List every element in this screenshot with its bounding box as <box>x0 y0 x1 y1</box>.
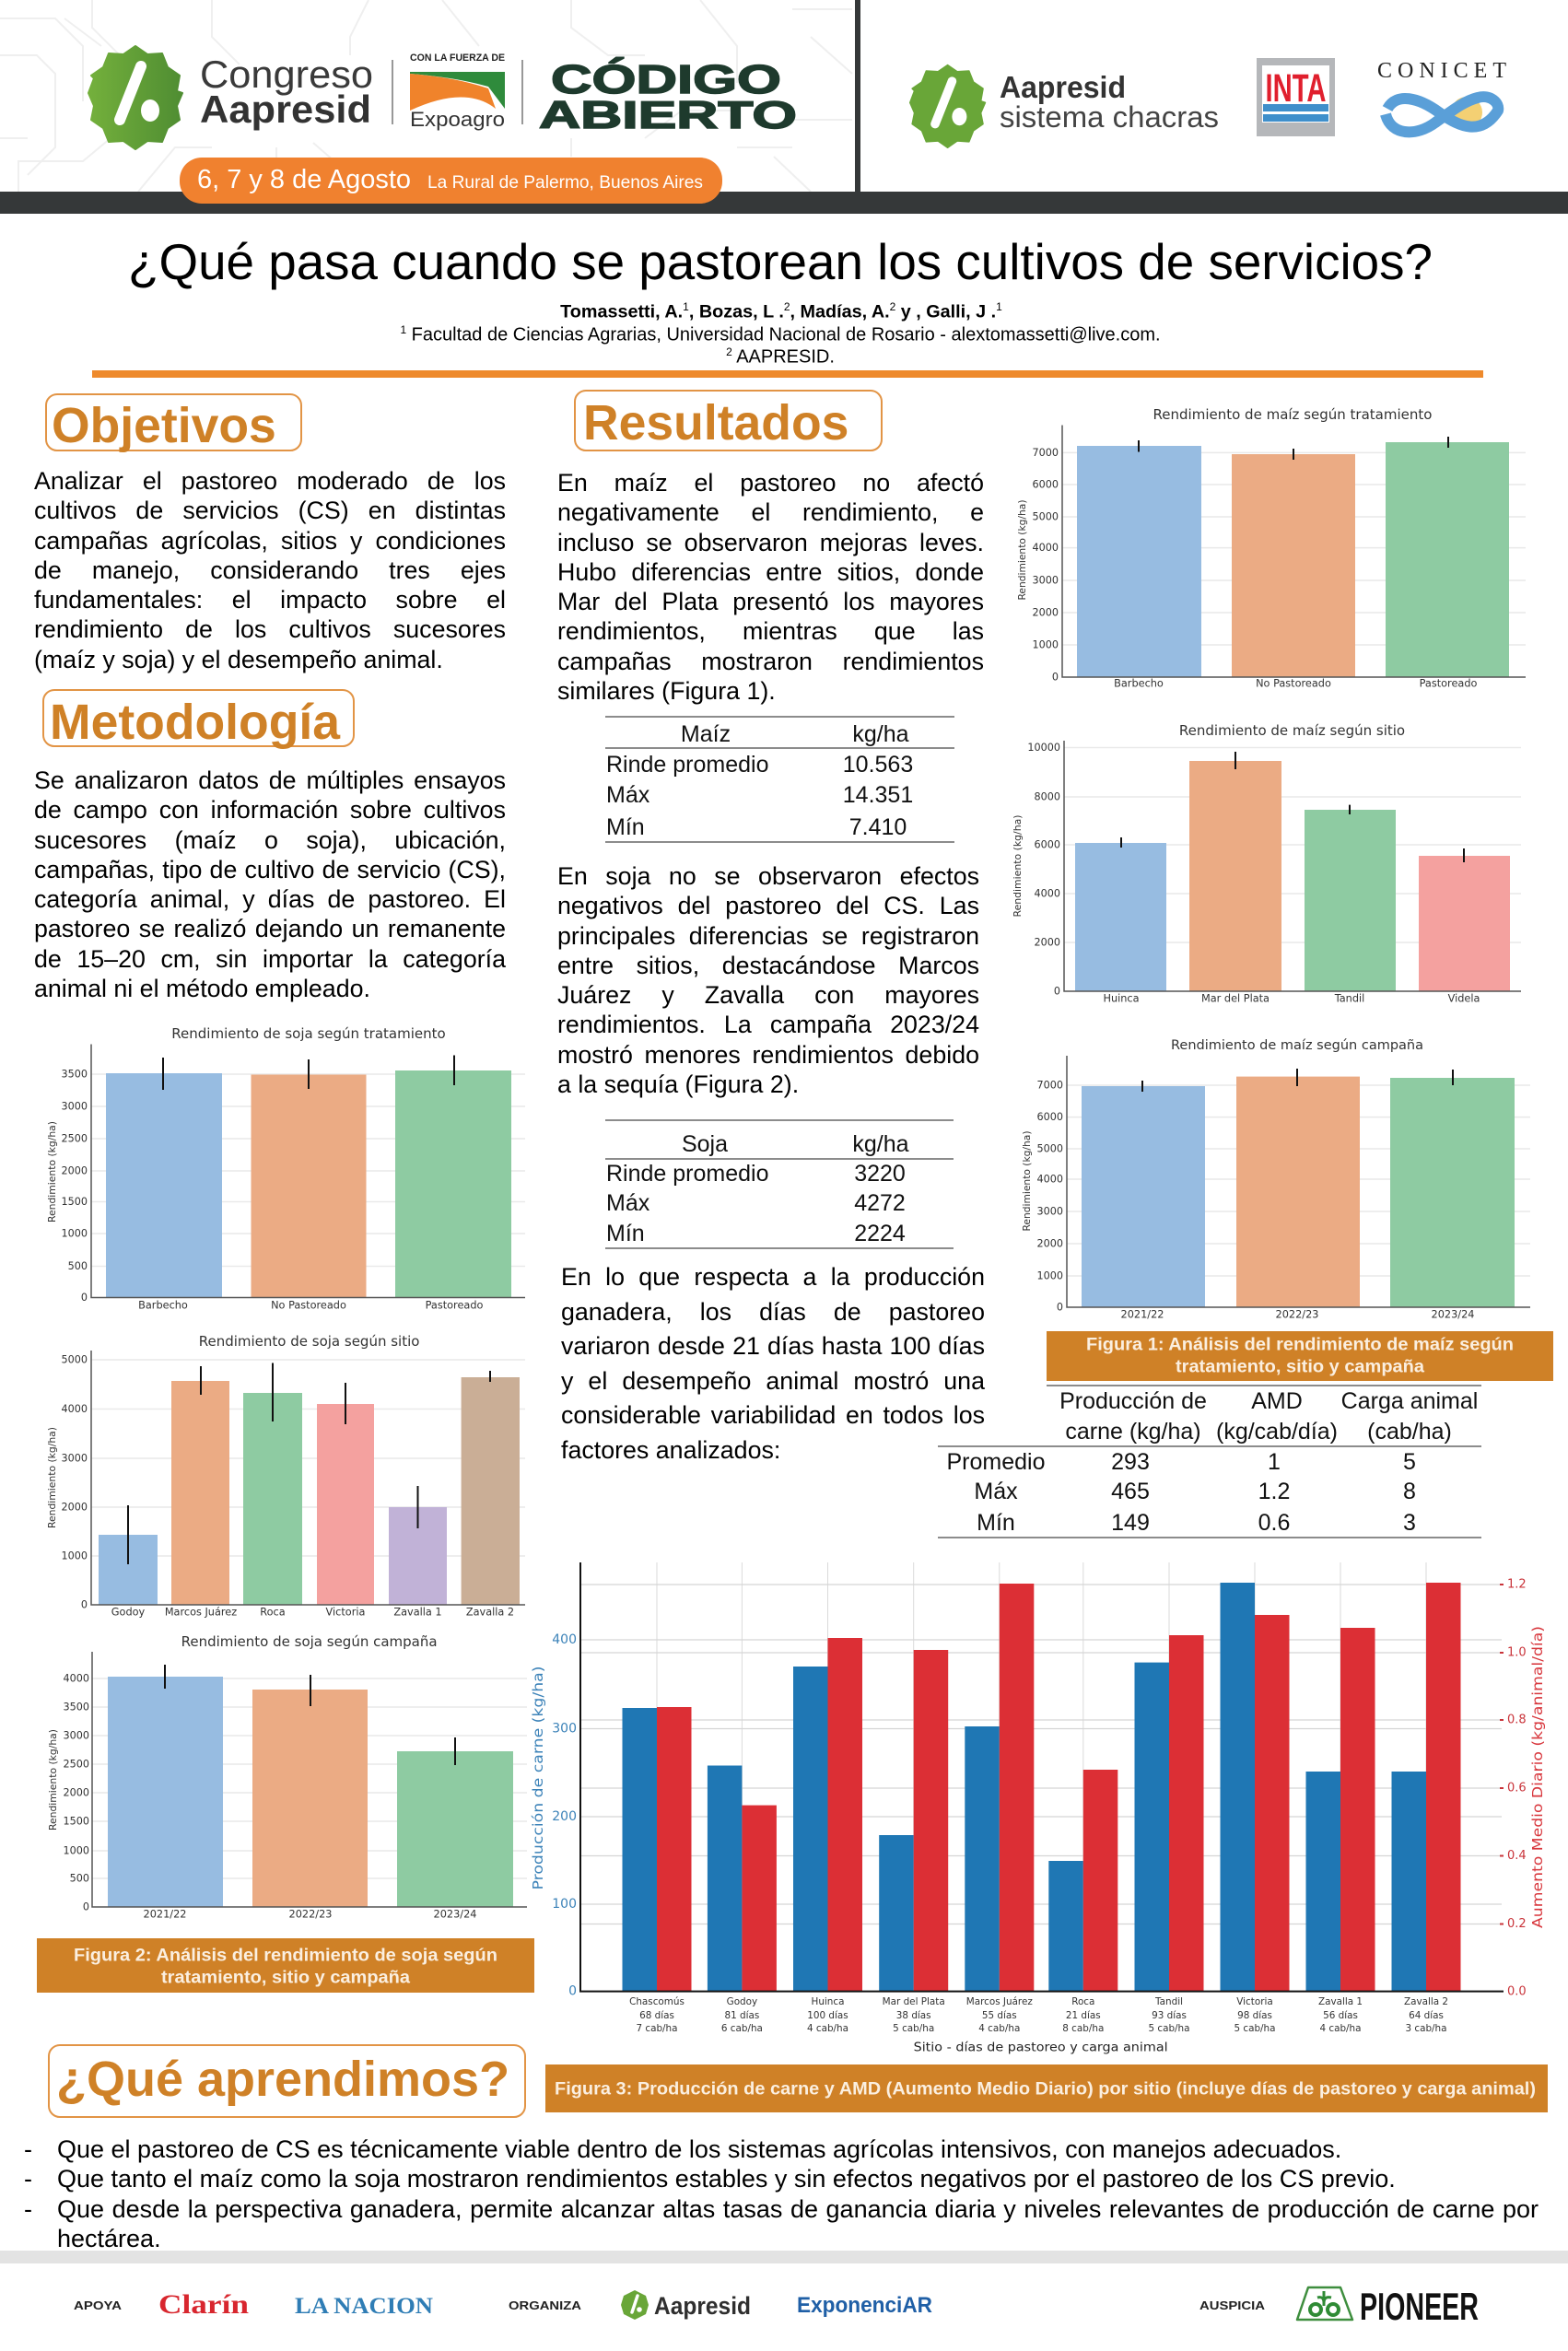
x axis site labels: 68 días <box>639 2010 674 2021</box>
chart: maíz según sitio: 0 <box>1054 986 1060 997</box>
chart: soja según tratamiento: 3500 <box>62 1069 88 1080</box>
table: soja: 2224 <box>854 1221 906 1246</box>
logo: Expoagro <box>392 53 523 131</box>
text: resultados soja: a la sequía (Figura 2). <box>557 1070 799 1098</box>
table: maíz: 10.563 <box>843 752 913 778</box>
x axis site labels: 4 cab/ha <box>807 2023 848 2034</box>
chart: maíz según campaña: 2023/24 <box>1432 1308 1474 1321</box>
x axis site labels: 4 cab/ha <box>978 2023 1020 2034</box>
chart: maíz según campaña: 0 <box>1057 1301 1063 1314</box>
text: resultados soja: rendimientos. La campaña 2023/24 <box>557 1011 979 1038</box>
text: producción ganadera <box>561 1263 986 1463</box>
table: producción animal: 1 <box>1268 1449 1281 1475</box>
chart: maíz según campaña: 3000 <box>1037 1205 1063 1218</box>
chart: maíz según tratamiento <box>1016 406 1526 689</box>
chart: soja según campaña: 2023/24 <box>434 1909 476 1920</box>
conclusions list: - <box>24 2135 32 2163</box>
text: resultados soja: En soja no se observaron efectos <box>557 862 979 890</box>
chart: maíz según campaña: 2000 <box>1037 1238 1063 1249</box>
chart: soja según sitio: 1000 <box>62 1550 88 1562</box>
chart: soja según sitio <box>46 1333 525 1618</box>
conclusions list: - <box>24 2195 32 2223</box>
chart: soja según tratamiento: 2500 <box>62 1133 88 1144</box>
chart: maíz según tratamiento: 6000 <box>1033 479 1059 490</box>
left axis ticks: 100 <box>552 1897 577 1912</box>
chart: maíz según sitio: 10000 <box>1027 742 1060 754</box>
x axis site labels: 5 cab/ha <box>1234 2023 1276 2034</box>
chart: soja según tratamiento: Barbecho <box>138 1299 188 1312</box>
chart: maíz según campaña: 5000 <box>1037 1142 1063 1155</box>
logo: INTA: INTA <box>1266 66 1327 111</box>
table: soja: kg/ha <box>852 1131 909 1157</box>
affiliation 2: 2 AAPRESID. <box>726 345 835 368</box>
table: soja <box>605 1119 954 1249</box>
x axis site labels: Chascomús <box>629 1996 685 2007</box>
x axis site labels: Marcos Juárez <box>966 1996 1033 2007</box>
text: resultados soja: mostró menores rendimientos debido <box>557 1041 979 1069</box>
logo: CONICET: CONICET <box>1377 59 1506 83</box>
left axis ticks: 200 <box>552 1809 577 1824</box>
chart: soja según campaña: 1000 <box>64 1844 89 1857</box>
pill text <box>197 165 703 194</box>
chart: maíz según sitio: 6000 <box>1035 838 1060 851</box>
conclusions list: hectárea. <box>57 2225 161 2252</box>
text: resultados soja: principales diferencias se registraron <box>557 922 979 950</box>
text: resultados maíz: Hubo diferencias entre sitios, donde <box>557 558 984 586</box>
chart: soja según sitio: Zavalla 1 <box>393 1607 442 1618</box>
header divider <box>855 0 860 192</box>
x axis site labels: Zavalla 1 <box>1318 1996 1363 2007</box>
logo: Aapresid badge <box>88 45 183 150</box>
x axis site labels: 98 días <box>1237 2010 1272 2021</box>
text: metodología: pastoreo se realizó dejando un remanente <box>34 915 506 942</box>
text: objetivos: rendimiento de los cultivos sucesores <box>34 615 506 643</box>
chart: soja según tratamiento: 0 <box>81 1292 88 1304</box>
chart: maíz según tratamiento: Pastoreado <box>1420 678 1477 689</box>
logo: Código Abierto: ABIERTO <box>539 93 797 136</box>
chart: soja según sitio: Roca <box>260 1607 286 1618</box>
text: metodología: de 15–20 cm, sin importar la categoría <box>34 945 506 973</box>
chart: soja según tratamiento: No Pastoreado <box>271 1299 346 1312</box>
logo: Congreso Aapresid wordmark <box>200 53 373 131</box>
chart: maíz según tratamiento: 2000 <box>1033 606 1059 619</box>
pill text: La Rural de Palermo, Buenos Aires <box>427 173 703 193</box>
left axis ticks <box>552 1632 577 1999</box>
x axis site labels: 38 días <box>896 2010 931 2021</box>
blue bars: producción de carne <box>623 1583 1426 1992</box>
chart: soja según campaña: Rendimiento (kg/ha) <box>47 1729 59 1831</box>
logo: Pioneer <box>1297 2285 1479 2328</box>
x axis site labels: Zavalla 2 <box>1404 1996 1448 2007</box>
caption: figura 1: tratamiento, sitio y campaña <box>1176 1358 1424 1376</box>
text: metodología: sucesores (maíz o soja), ubicación, <box>34 826 506 854</box>
text: resultados maíz: campañas mostraron rendimientos <box>557 648 984 675</box>
right axis ticks: 1.2 <box>1507 1577 1527 1592</box>
text: resultados soja: entre sitios, destacándose Marcos <box>557 952 979 979</box>
chart: maíz según campaña: 7000 <box>1037 1080 1063 1091</box>
chart: soja según sitio: 3000 <box>62 1452 88 1465</box>
chart: soja según tratamiento: 3000 <box>62 1100 88 1113</box>
chart: soja según campaña: 0 <box>83 1901 89 1912</box>
right axis ticks: 0.6 <box>1507 1782 1527 1795</box>
x axis site labels: 55 días <box>982 2010 1017 2021</box>
chart: maíz según tratamiento: 4000 <box>1033 542 1059 554</box>
caption: figura 1: Figura 1: Análisis del rendimiento de maíz según <box>1086 1336 1514 1354</box>
chart: maíz según sitio: Mar del Plata <box>1201 993 1270 1004</box>
heading: ¿Qué aprendimos?: ¿Qué aprendimos? <box>56 2052 509 2107</box>
chart: maíz según sitio <box>1012 722 1521 1004</box>
heading: Resultados: Resultados <box>583 396 848 450</box>
left axis title: Producción de carne (kg/ha) <box>530 1666 546 1890</box>
text: producción ganadera: variaron desde 21 días hasta 100 días <box>561 1332 985 1360</box>
text: objetivos: Analizar el pastoreo moderado de los <box>34 467 506 495</box>
chart: maíz según campaña: 2022/23 <box>1276 1308 1318 1321</box>
text: metodología: Se analizaron datos de múltiples ensayos <box>34 766 506 794</box>
conclusions list: Que tanto el maíz como la soja mostraron rendimientos estables y sin efectos negativos por el pastoreo de los CS previo. <box>57 2165 1396 2193</box>
x axis site labels: Huinca <box>812 1996 844 2007</box>
chart: soja según sitio: Marcos Juárez <box>165 1607 237 1618</box>
chart: maíz según campaña <box>1021 1038 1530 1321</box>
text: producción ganadera: En lo que respecta a la producción <box>561 1263 985 1291</box>
table: producción animal: Carga animal <box>1341 1388 1478 1414</box>
table: producción animal <box>938 1385 1481 1538</box>
text: producción ganadera: y el desempeño animal mostró una <box>561 1367 985 1395</box>
chart: soja según campaña: 3500 <box>64 1701 89 1714</box>
conclusions list: Que el pastoreo de CS es técnicamente viable dentro de los sistemas agrícolas intensivos, con manejos adecuados. <box>57 2135 1341 2163</box>
table: maíz: kg/ha <box>852 721 909 747</box>
logo: Congreso Aapresid wordmark: Aapresid <box>200 88 371 131</box>
logo: Expoagro: CON LA FUERZA DE <box>410 53 505 64</box>
chart: soja según sitio: Godoy <box>111 1607 146 1618</box>
organiza label: ORGANIZA <box>509 2298 582 2312</box>
x axis site labels: Godoy <box>727 1996 757 2007</box>
chart: soja según sitio: 2000 <box>62 1502 88 1513</box>
right axis title: Aumento Medio Diario (kg/animal/día) <box>1529 1626 1546 1928</box>
x axis site labels: 6 cab/ha <box>721 2023 763 2034</box>
table: producción animal: 149 <box>1111 1510 1150 1536</box>
x axis site labels: Roca <box>1071 1996 1094 2007</box>
conclusions list <box>24 2135 1539 2252</box>
text: resultados maíz: negativamente el rendimiento, e <box>557 498 984 526</box>
chart: soja según tratamiento: Rendimiento de soja según tratamiento <box>171 1025 446 1042</box>
left axis ticks: 400 <box>552 1632 577 1647</box>
logo: Código Abierto: CÓDIGO <box>551 56 781 102</box>
x axis site labels: 100 días <box>807 2010 848 2021</box>
x axis site labels: 5 cab/ha <box>893 2023 934 2034</box>
text: metodología: categoría animal, y días de pastoreo. El <box>34 885 506 913</box>
x axis site labels: 7 cab/ha <box>636 2023 678 2034</box>
chart: maíz según sitio: 8000 <box>1035 790 1060 803</box>
x axis site labels: 5 cab/ha <box>1148 2023 1190 2034</box>
chart: soja según tratamiento: 2000 <box>62 1164 88 1177</box>
text: resultados maíz <box>557 469 984 705</box>
table: producción animal: Producción de <box>1059 1388 1207 1414</box>
logo: Aapresid sistema chacras: sistema chacras <box>1000 100 1219 134</box>
text: resultados maíz: Mar del Plata presentó los mayores <box>557 588 984 615</box>
x axis site labels: 56 días <box>1323 2010 1358 2021</box>
x axis site labels: 3 cab/ha <box>1405 2023 1447 2034</box>
chart: soja según campaña: 2500 <box>64 1758 89 1771</box>
text: resultados maíz: similares (Figura 1). <box>557 677 776 705</box>
chart: maíz según campaña: 2021/22 <box>1121 1308 1164 1321</box>
apoya label: APOYA <box>74 2298 123 2312</box>
logo: Código Abierto <box>539 56 797 136</box>
logo: Congreso Aapresid wordmark: Congreso <box>200 53 373 96</box>
chart: soja según sitio: 5000 <box>62 1354 88 1365</box>
right axis ticks <box>1507 1577 1527 1999</box>
chart: maíz según tratamiento: No Pastoreado <box>1256 678 1331 689</box>
x axis site labels: 21 días <box>1066 2010 1101 2021</box>
text: resultados soja: negativos del pastoreo del CS. Las <box>557 892 979 919</box>
chart: maíz según tratamiento: 5000 <box>1033 510 1059 523</box>
caption: figura 3 <box>545 2064 1548 2112</box>
caption: figura 3: Figura 3: Producción de carne y AMD (Aumento Medio Diario) por sitio (incluye días de pastoreo y carga animal) <box>555 2080 1536 2099</box>
chart: maíz según campaña: 4000 <box>1037 1174 1063 1185</box>
chart: soja según campaña: 3000 <box>64 1730 89 1741</box>
chart: maíz según sitio: Huinca <box>1103 993 1140 1004</box>
logo: INTA <box>1257 58 1335 136</box>
table: maíz: Máx <box>606 782 650 808</box>
date pill <box>180 158 722 204</box>
chart: soja según campaña: 2021/22 <box>144 1909 186 1920</box>
chart: maíz según campaña: Rendimiento (kg/ha) <box>1021 1131 1033 1231</box>
logo: Expoagro: Expoagro <box>410 108 505 131</box>
text: metodología: animal ni el método empleado. <box>34 975 370 1002</box>
x axis site labels: 64 días <box>1409 2010 1444 2021</box>
logo: Aapresid sistema chacras: Aapresid <box>1000 70 1126 104</box>
table: soja: 3220 <box>854 1161 906 1187</box>
footer sponsor logos <box>74 2285 1479 2328</box>
table: producción animal: (kg/cab/día) <box>1216 1419 1338 1445</box>
heading: Objetivos: Objetivos <box>52 399 276 453</box>
logo: La Nación: LA NACION <box>295 2294 433 2319</box>
table: soja: Máx <box>606 1190 650 1216</box>
text: producción ganadera: considerable variabilidad en todos los <box>561 1401 985 1429</box>
table: producción animal: 1.2 <box>1258 1479 1290 1504</box>
table: soja: 4272 <box>854 1190 906 1216</box>
affiliation 1: 1 Facultad de Ciencias Agrarias, Universidad Nacional de Rosario - alextomassetti@live.com. <box>400 323 1161 345</box>
text: metodología: campañas, tipo de cultivo de servicio (CS), <box>34 856 506 883</box>
chart: soja según campaña: 500 <box>70 1872 89 1885</box>
left axis ticks: 0 <box>568 1984 577 1999</box>
table: producción animal: Promedio <box>947 1449 1045 1475</box>
logo: Aapresid sistema chacras <box>909 64 1219 148</box>
red bars: AMD <box>657 1583 1461 1992</box>
table: soja: Soja <box>682 1131 728 1157</box>
caption: figura 2 <box>37 1938 534 1993</box>
table: maíz <box>605 716 954 843</box>
chart: maíz según sitio: 2000 <box>1035 936 1060 949</box>
text: producción ganadera: factores analizados: <box>561 1435 780 1463</box>
logo: Pioneer: PIONEER <box>1360 2285 1479 2328</box>
chart: maíz según sitio: Rendimiento de maíz según sitio <box>1179 722 1405 739</box>
chart: maíz según tratamiento: Rendimiento de maíz según tratamiento <box>1153 406 1432 423</box>
chart: maíz según campaña: 1000 <box>1037 1269 1063 1282</box>
x axis site labels: 4 cab/ha <box>1319 2023 1362 2034</box>
table: producción animal: 3 <box>1403 1510 1416 1536</box>
table: producción animal: Máx <box>974 1479 1018 1504</box>
chart: maíz según sitio: 4000 <box>1035 888 1060 899</box>
table: producción animal: 293 <box>1111 1449 1150 1475</box>
text: objetivos: campañas agrícolas, sitios y condiciones <box>34 527 506 555</box>
chart: soja según sitio: Victoria <box>326 1607 365 1618</box>
text: objetivos: de manejo, considerando tres ejes <box>34 556 506 584</box>
chart: producción de carne y AMD por sitio <box>530 1562 1546 2054</box>
text: metodología <box>34 766 507 1002</box>
table: soja: Mín <box>606 1221 645 1246</box>
authors: Tomassetti, A.1, Bozas, L .2, Madías, A.2 y , Galli, J .1 <box>560 300 1002 322</box>
footer band <box>0 2251 1568 2263</box>
chart: soja según tratamiento: 500 <box>68 1260 88 1272</box>
table: producción animal: 0.6 <box>1258 1510 1290 1536</box>
right axis ticks: 0.4 <box>1507 1849 1527 1863</box>
right axis ticks: 1.0 <box>1507 1645 1527 1660</box>
table: soja: Rinde promedio <box>606 1161 768 1187</box>
text: metodología: de campo con información sobre cultivos <box>34 796 506 824</box>
chart: soja según sitio: Rendimiento (kg/ha) <box>46 1427 58 1528</box>
x axis site labels <box>629 1996 1448 2034</box>
chart: soja según tratamiento: Rendimiento (kg/ha) <box>46 1121 58 1222</box>
x axis site labels: 8 cab/ha <box>1062 2023 1104 2034</box>
pill text: 6, 7 y 8 de Agosto <box>197 165 411 194</box>
text: resultados maíz: incluso se observaron mejoras leves. <box>557 529 984 556</box>
chart: maíz según tratamiento: 1000 <box>1033 639 1059 650</box>
table: producción animal: carne (kg/ha) <box>1065 1419 1201 1445</box>
chart: soja según sitio: Rendimiento de soja según sitio <box>199 1333 419 1350</box>
table: maíz: Rinde promedio <box>606 752 768 778</box>
x axis site labels: Mar del Plata <box>883 1996 945 2007</box>
right axis ticks: 0.0 <box>1507 1984 1527 1999</box>
x axis site labels: 81 días <box>725 2010 759 2021</box>
text: resultados maíz: En maíz el pastoreo no afectó <box>557 469 984 497</box>
table: producción animal: 5 <box>1403 1449 1416 1475</box>
conclusions list: - <box>24 2165 32 2193</box>
table: producción animal: 8 <box>1403 1479 1416 1504</box>
left axis ticks: 300 <box>552 1721 577 1736</box>
logo: ExponenciAR: ExponenciAR <box>797 2293 932 2318</box>
table: maíz: Maíz <box>681 721 731 747</box>
logo: Aapresid small: Aapresid <box>654 2292 751 2320</box>
header band <box>0 0 1568 214</box>
caption: figura 2: Figura 2: Análisis del rendimiento de soja según <box>74 1946 497 1966</box>
logo: Aapresid small <box>621 2290 751 2320</box>
chart: soja según campaña: 2000 <box>64 1787 89 1798</box>
chart: maíz según tratamiento: Barbecho <box>1114 678 1164 689</box>
chart: soja según tratamiento: 1500 <box>62 1196 88 1208</box>
caption: figura 1 <box>1047 1331 1553 1381</box>
chart: soja según campaña: 4000 <box>64 1673 89 1684</box>
auspicia label: AUSPICIA <box>1199 2298 1266 2312</box>
chart: soja según campaña: Rendimiento de soja según campaña <box>181 1633 438 1650</box>
chart: maíz según sitio: Tandil <box>1334 993 1364 1004</box>
x axis site labels: Tandil <box>1154 1996 1183 2007</box>
chart: soja según tratamiento <box>46 1025 525 1312</box>
chart: soja según sitio: 0 <box>81 1599 88 1610</box>
conclusions list: Que desde la perspectiva ganadera, permite alcanzar altas tasas de ganancia diaria y niveles relevantes de producción de carne por <box>57 2195 1539 2223</box>
table: producción animal: (cab/ha) <box>1367 1419 1452 1445</box>
table: producción animal: 465 <box>1111 1479 1150 1504</box>
chart: maíz según tratamiento: 3000 <box>1033 575 1059 586</box>
chart: soja según tratamiento: Pastoreado <box>426 1299 483 1312</box>
x axis site labels: Victoria <box>1236 1996 1273 2007</box>
logo: CONICET <box>1377 59 1506 138</box>
right axis ticks: 0.2 <box>1507 1917 1527 1931</box>
logo: Clarín: Clarín <box>158 2289 249 2320</box>
title: ¿Qué pasa cuando se pastorean los cultivos de servicios? <box>128 233 1433 290</box>
chart: soja según tratamiento: 1000 <box>62 1227 88 1240</box>
text: resultados maíz: rendimientos, mientras que las <box>557 617 984 645</box>
x axis site labels: 93 días <box>1152 2010 1187 2021</box>
x axis title: Sitio - días de pastoreo y carga animal <box>914 2041 1168 2054</box>
chart: soja según campaña: 1500 <box>64 1815 89 1828</box>
heading: Metodología: Metodología <box>50 696 340 750</box>
caption: figura 2: tratamiento, sitio y campaña <box>161 1968 410 1988</box>
chart: maíz según sitio: Videla <box>1448 993 1480 1004</box>
chart: maíz según campaña: Rendimiento de maíz según campaña <box>1171 1038 1423 1053</box>
chart: soja según sitio: 4000 <box>62 1403 88 1415</box>
chart: soja según campaña: 2022/23 <box>289 1909 332 1920</box>
text: resultados soja <box>557 862 979 1098</box>
chart: maíz según tratamiento: 0 <box>1052 671 1059 684</box>
table: producción animal: AMD <box>1251 1388 1303 1414</box>
table: maíz: 7.410 <box>849 814 907 840</box>
chart: maíz según campaña: 6000 <box>1037 1111 1063 1123</box>
chart: soja según campaña <box>47 1633 527 1920</box>
text: objetivos: cultivos de servicios (CS) en distintas <box>34 497 506 524</box>
text: resultados soja: Juárez y Zavalla con mayores <box>557 981 979 1009</box>
chart: maíz según tratamiento: Rendimiento (kg/ha) <box>1016 499 1028 601</box>
chart: maíz según sitio: Rendimiento (kg/ha) <box>1012 814 1024 918</box>
chart: soja según sitio: Zavalla 2 <box>466 1607 514 1618</box>
text: objetivos <box>34 467 506 673</box>
text: objetivos: (maíz y soja) y el desempeño animal. <box>34 646 443 673</box>
dark bar <box>0 192 1568 214</box>
table: maíz: 14.351 <box>843 782 913 808</box>
table: maíz: Mín <box>606 814 645 840</box>
text: producción ganadera: ganadera, los días de pastoreo <box>561 1297 985 1325</box>
circuit background pattern <box>0 0 853 192</box>
chart: maíz según tratamiento: 7000 <box>1033 447 1059 459</box>
text: objetivos: fundamentales: el impacto sobre el <box>34 586 506 614</box>
right axis ticks: 0.8 <box>1507 1714 1527 1726</box>
orange rule <box>92 370 1483 378</box>
table: producción animal: Mín <box>977 1510 1015 1536</box>
